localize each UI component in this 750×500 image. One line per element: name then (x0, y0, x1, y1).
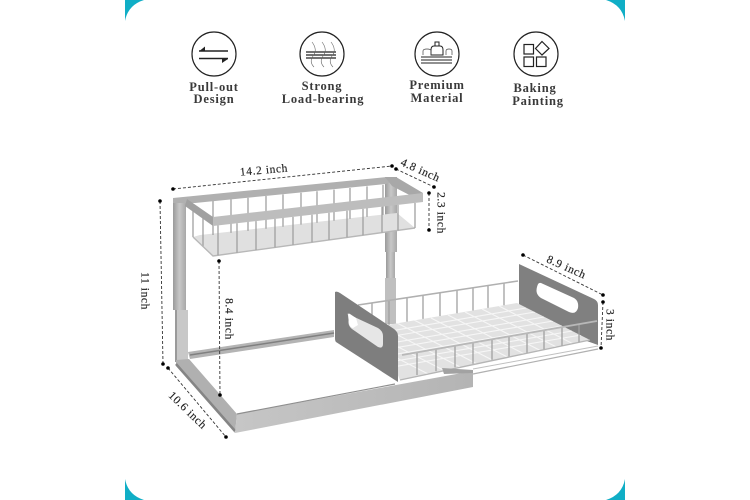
dimension: 8.9 inch (521, 253, 605, 297)
lower basket (326, 264, 598, 382)
dimension: 2.3 inch: 2.3 inch (434, 192, 446, 234)
feature: premium material: Premium (409, 78, 465, 92)
feature: strong load-bearing (282, 32, 364, 106)
upper basket (173, 177, 423, 256)
feature: premium material: Material (411, 91, 463, 105)
dimension: 11 inch: 11 inch (138, 272, 150, 310)
frame front beam (235, 368, 473, 433)
dimension: 10.6 inch (166, 366, 228, 439)
feature: pull-out design (189, 32, 239, 106)
feature: strong load-bearing: Load-bearing (282, 92, 364, 106)
left post (173, 198, 188, 362)
feature: baking painting: Baking (513, 81, 557, 95)
basket floor (385, 303, 590, 380)
dimension: 2.3 inch (427, 191, 446, 234)
feature: baking painting: Painting (512, 94, 564, 108)
feature: strong load-bearing: Strong (302, 79, 342, 93)
product: shelf rack (173, 177, 598, 433)
dimension: 8.4 inch (217, 259, 234, 397)
dimension: 3 inch: 3 inch (603, 309, 615, 341)
dimension: 8.9 inch: 8.9 inch (545, 254, 588, 282)
dimension: 8.4 inch: 8.4 inch (222, 298, 234, 340)
teal corners (125, 0, 625, 500)
feature: baking painting (512, 32, 564, 108)
frame back beam (188, 330, 334, 359)
dimension: 14.2 inch (171, 163, 394, 191)
basket top frame (173, 177, 396, 203)
feature: pull-out design: Pull-out (189, 80, 239, 94)
feature: pull-out design: Design (194, 92, 234, 106)
feature: premium material (409, 32, 465, 105)
right handle panel (519, 264, 598, 345)
dimension: 14.2 inch: 14.2 inch (239, 163, 289, 179)
dimension: 4.8 inch: 4.8 inch (399, 157, 442, 185)
dimension: 3 inch (599, 300, 615, 350)
right post (385, 177, 397, 324)
dimension: 10.6 inch: 10.6 inch (166, 390, 209, 432)
frame side beam (176, 359, 237, 433)
dimension: 11 inch (138, 199, 165, 366)
left handle panel (335, 292, 398, 382)
